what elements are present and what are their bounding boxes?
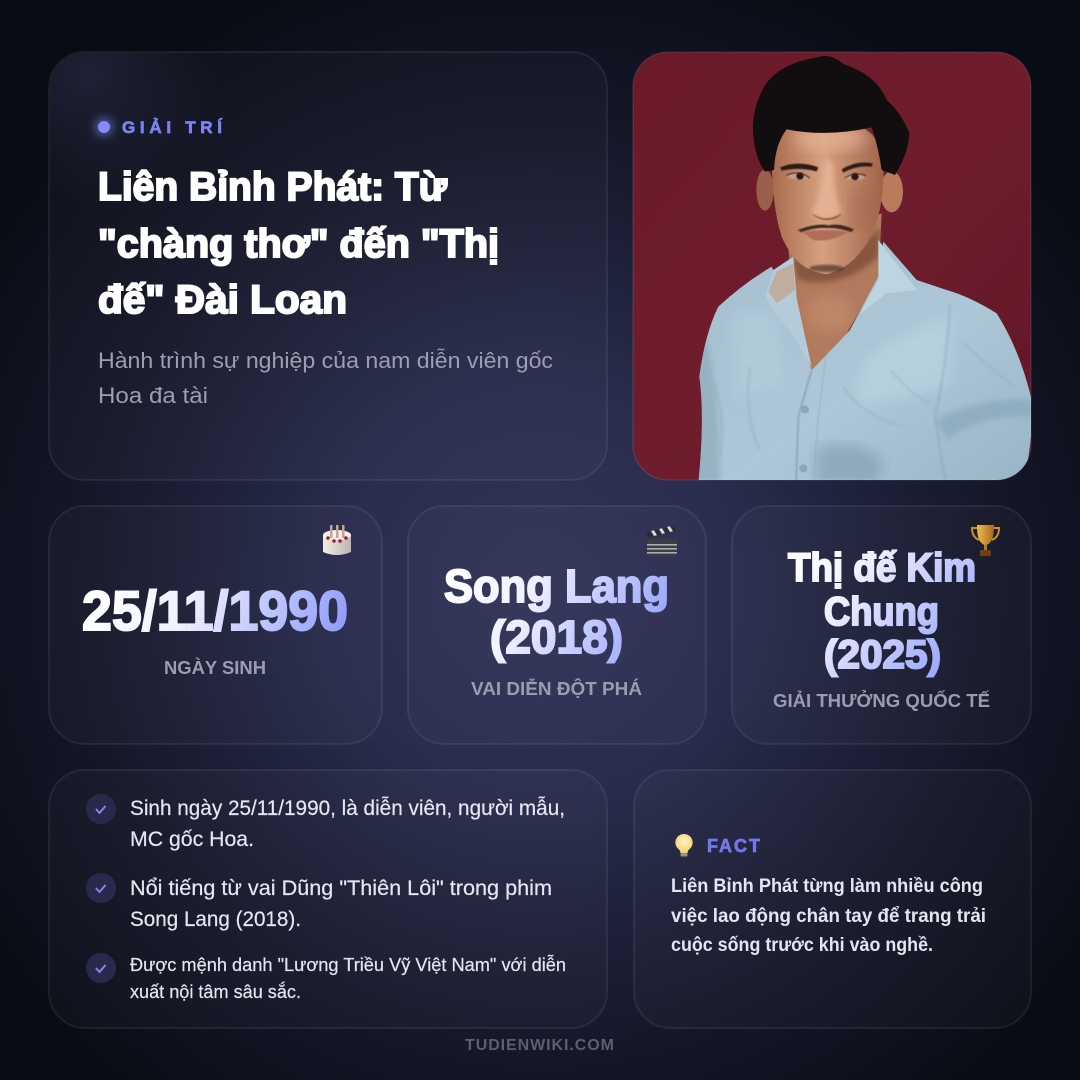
title: "chàng thơ" đến "Thị bbox=[98, 222, 499, 266]
title: Liên Bỉnh Phát: Từ bbox=[98, 165, 447, 209]
subtitle: Hành trình sự nghiệp của nam diễn viên gốc bbox=[98, 348, 553, 373]
eyes bbox=[788, 173, 809, 179]
list item 2: Nổi tiếng từ vai Dũng "Thiên Lôi" trong phim bbox=[130, 877, 552, 900]
hair bbox=[753, 56, 909, 175]
list item 2: Song Lang (2018). bbox=[130, 908, 301, 931]
stat label: NGÀY SINH bbox=[164, 657, 266, 678]
stat value: Song Lang bbox=[444, 560, 669, 612]
stat label: GIẢI THƯỞNG QUỐC TẾ bbox=[773, 690, 990, 711]
fact text: việc lao động chân tay để trang trải bbox=[671, 906, 986, 927]
stat value: (2025) bbox=[824, 633, 941, 677]
stat value: Chung bbox=[824, 590, 939, 634]
stat value bbox=[444, 560, 669, 663]
shirt bbox=[693, 240, 1032, 483]
panel: fun fact bbox=[634, 770, 1031, 1028]
stat card: birth date bbox=[49, 506, 382, 744]
title: đế" Đài Loan bbox=[98, 278, 347, 322]
fact label: FACT bbox=[707, 836, 760, 856]
subtitle: Hoa đa tài bbox=[98, 383, 208, 408]
ears and neck bbox=[756, 169, 903, 370]
stat label: VAI DIỄN ĐỘT PHÁ bbox=[471, 678, 642, 699]
icon: trophy bbox=[972, 525, 999, 556]
list item 3: Được mệnh danh "Lương Triều Vỹ Việt Nam" với diễn bbox=[130, 954, 566, 975]
stat card: international award bbox=[732, 506, 1031, 744]
list item 3: xuất nội tâm sâu sắc. bbox=[130, 981, 301, 1002]
list item 1 bbox=[86, 794, 565, 851]
fact text: cuộc sống trước khi vào nghề. bbox=[671, 935, 933, 956]
stat value bbox=[788, 546, 976, 677]
list item 1: Sinh ngày 25/11/1990, là diễn viên, người mẫu, bbox=[130, 797, 565, 820]
icon: light bulb bbox=[675, 834, 693, 856]
list item 1: MC gốc Hoa. bbox=[130, 828, 254, 851]
list item 3 bbox=[86, 953, 566, 1002]
placket and buttons bbox=[796, 370, 812, 483]
category tag: GIẢI TRÍ bbox=[122, 118, 223, 137]
stat value: Thị đế Kim bbox=[788, 546, 976, 590]
list item 2 bbox=[86, 873, 552, 931]
fact text bbox=[671, 876, 986, 956]
fact text: Liên Bỉnh Phát từng làm nhiều công bbox=[671, 876, 983, 897]
subtitle bbox=[98, 348, 553, 408]
icon: clapperboard bbox=[646, 526, 677, 556]
footer source: TUDIENWIKI.COM bbox=[465, 1037, 614, 1054]
title bbox=[98, 165, 499, 322]
panel: key points list bbox=[49, 770, 607, 1028]
goatee bbox=[809, 265, 844, 272]
collars bbox=[766, 257, 812, 367]
face bbox=[772, 118, 884, 274]
icon: birthday cake bbox=[323, 525, 351, 555]
panel: portrait photo bbox=[630, 50, 1040, 490]
stat value: (2018) bbox=[490, 611, 623, 663]
stat card: breakthrough role bbox=[408, 506, 706, 744]
nose bbox=[812, 213, 842, 220]
moustache and mouth bbox=[798, 225, 854, 232]
panel: hero heading bbox=[49, 52, 607, 480]
eyebrows bbox=[780, 164, 818, 171]
stat value: 25/11/1990 bbox=[82, 579, 348, 642]
